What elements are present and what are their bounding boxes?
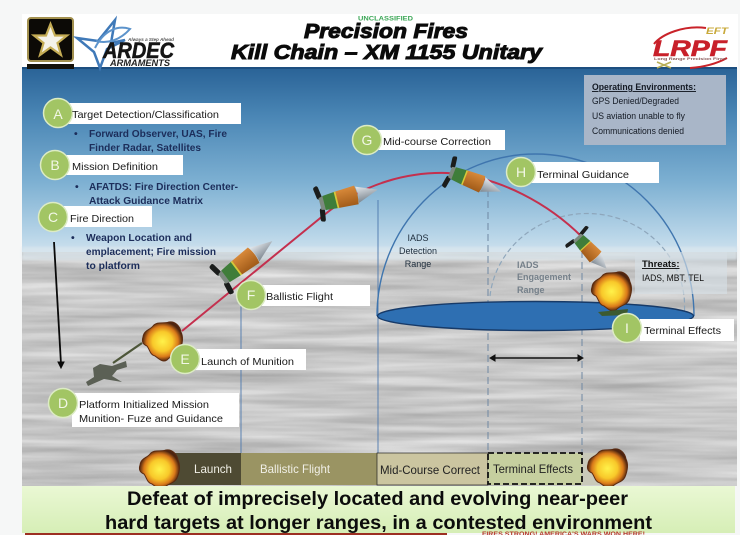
logo: ARDEC Armaments: ARMAMENTS xyxy=(109,58,170,68)
step H: H xyxy=(516,164,526,180)
munition: mid-course xyxy=(441,155,507,207)
logo: LRPF: EFT xyxy=(706,26,730,36)
logo: ARDEC Armaments: Always a Step Ahead xyxy=(127,37,174,42)
step H: Terminal Guidance xyxy=(537,169,629,181)
phase bar: Ballistic Flight xyxy=(260,462,331,476)
step F xyxy=(236,280,370,310)
step C: Weapon Location and xyxy=(86,232,192,244)
classification marking: UNCLASSIFIED xyxy=(358,16,413,22)
step B: B xyxy=(50,157,60,173)
logo: ARDEC Armaments: ARDEC xyxy=(102,38,175,63)
step E: E xyxy=(180,351,190,367)
slide header background xyxy=(22,14,738,68)
conclusion banner: Defeat of imprecisely located and evolving near-peer xyxy=(127,488,628,510)
range arrow xyxy=(490,355,583,361)
step B: Attack Guidance Matrix xyxy=(89,195,203,207)
threats box xyxy=(635,252,727,294)
horizon glow xyxy=(22,247,737,260)
operating environments box xyxy=(584,75,726,145)
step D: Munition- Fuze and Guidance xyxy=(79,413,223,425)
step G: G xyxy=(362,132,372,148)
step D xyxy=(48,388,239,427)
IADS detection range dome: IADS xyxy=(407,233,429,243)
logo: US Army xyxy=(27,18,74,69)
step G: Mid-course Correction xyxy=(383,136,491,148)
operating environments box: Communications denied xyxy=(592,126,684,137)
title xyxy=(231,21,543,64)
IADS engagement range dome: Range xyxy=(517,285,545,295)
phase guide lines xyxy=(241,190,582,453)
step D: D xyxy=(58,395,68,411)
phase bar: Terminal Effects xyxy=(493,462,573,476)
step B: Mission Definition xyxy=(72,161,158,173)
sky background xyxy=(22,68,737,258)
explosion: phase bar left xyxy=(139,450,180,489)
logo: LRPF: Long Range Precision Fires xyxy=(654,57,726,61)
step I: Terminal Effects xyxy=(644,325,721,337)
IADS detection range dome: Detection xyxy=(399,246,437,256)
IADS engagement range dome: Engagement xyxy=(517,272,571,282)
step C: C xyxy=(48,209,58,225)
threats box: Threats: xyxy=(642,259,679,270)
step A: Finder Radar, Satellites xyxy=(89,142,201,154)
explosion: phase bar right xyxy=(587,449,628,488)
snow field background xyxy=(22,252,737,486)
step A: Forward Observer, UAS, Fire xyxy=(89,128,227,140)
step C xyxy=(38,202,216,272)
title: Kill Chain – XM 1155 Unitary xyxy=(231,42,543,64)
step E xyxy=(170,344,306,374)
explosion: target xyxy=(591,272,632,311)
step D: Platform Initialized Mission xyxy=(79,399,209,411)
operating environments box: GPS Denied/Degraded xyxy=(592,96,679,107)
munition: apogee approach xyxy=(312,172,382,223)
sequence arrow xyxy=(54,242,64,368)
IADS detection range dome: Range xyxy=(405,259,431,269)
logo: LRPF xyxy=(653,26,730,68)
step B: • xyxy=(75,181,79,193)
phase bar xyxy=(160,453,604,485)
operating environments box: Operating Environments: xyxy=(592,82,696,93)
step G xyxy=(352,126,505,154)
step C: • xyxy=(71,232,75,244)
conclusion banner: hard targets at longer ranges, in a contested environment xyxy=(105,512,653,534)
operating environments box: US aviation unable to fly xyxy=(592,111,685,122)
step A: A xyxy=(53,106,63,122)
title: Precision Fires xyxy=(304,21,468,43)
IADS detection range dome xyxy=(377,154,694,316)
step B: AFATDS: Fire Direction Center- xyxy=(89,181,238,193)
step C: to platform xyxy=(86,260,140,272)
step B xyxy=(40,150,238,207)
step A xyxy=(44,98,241,154)
step E: Launch of Munition xyxy=(201,356,294,368)
munition: ballistic ascent xyxy=(208,226,284,296)
step F: Ballistic Flight xyxy=(266,291,333,303)
trajectory xyxy=(182,173,582,331)
step A: Target Detection/Classification xyxy=(72,109,219,121)
logo: LRPF: LRPF xyxy=(653,36,728,61)
step H xyxy=(506,158,659,186)
munition: terminal xyxy=(564,225,618,279)
step F: F xyxy=(247,287,255,303)
threats box: IADS, MBT, TEL xyxy=(642,273,704,284)
phase bar: Mid-Course Correct xyxy=(380,463,481,477)
step I xyxy=(612,314,734,342)
conclusion banner xyxy=(22,486,735,534)
IADS engagement range dome: IADS xyxy=(517,260,539,270)
target area ellipse xyxy=(378,302,694,330)
target vehicle xyxy=(598,309,628,316)
phase bar: Launch xyxy=(194,462,232,476)
logo: ARDEC Armaments xyxy=(77,20,175,68)
howitzer platform xyxy=(86,343,142,386)
IADS engagement range dome xyxy=(490,213,685,316)
explosion: launch xyxy=(142,322,183,361)
step C: emplacement; Fire mission xyxy=(86,246,216,258)
step A: • xyxy=(74,128,78,140)
step I: I xyxy=(625,320,629,336)
step C: Fire Direction xyxy=(70,213,134,225)
